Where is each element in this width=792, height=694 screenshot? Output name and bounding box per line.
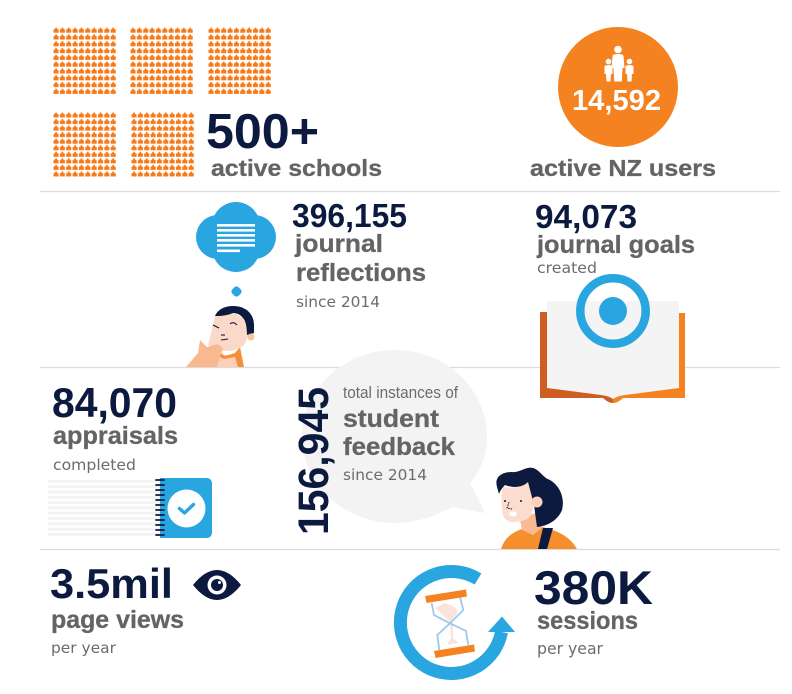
text: total instances of: total instances of [343,383,458,402]
number: 14,592: 14,592 [572,85,661,117]
panel: active schools [53,27,382,181]
label: active NZ users: active NZ users [530,155,716,181]
panel: journal reflections: reflections [296,259,426,287]
label: page views: page views [51,606,184,634]
icon: eye [193,570,241,600]
label: student feedback: student [343,405,440,433]
number: 380K: 380K [534,561,653,614]
panel: page views [50,560,241,657]
icon: thought cloud [196,202,276,298]
label: journal goals: journal goals [536,231,695,259]
panel: journal goals [535,198,695,403]
note: per year: per year [51,639,117,657]
number: 396,155: 396,155 [292,197,407,234]
number: 94,073: 94,073 [535,198,637,235]
panel: student feedback [290,350,577,549]
number: 500+: 500+ [206,105,319,159]
label: sessions: sessions [537,607,638,635]
icon: thinking man [186,306,254,367]
label: active schools: active schools [211,155,382,181]
label: appraisals: appraisals [53,422,178,450]
divider lines [40,192,780,550]
note: per year: per year [537,639,603,658]
icon: woman [496,468,577,549]
icon: hourglass with circular arrow [400,572,515,674]
note: since 2014: since 2014 [343,466,427,484]
panel: appraisals [48,379,212,538]
icon: orange circle with people [558,27,678,147]
note: since 2014: since 2014 [296,293,380,311]
number: 156,945: 156,945 [290,387,338,535]
label: journal reflections: journal [294,230,383,258]
note: completed: completed [53,456,136,474]
panel: student feedback: feedback [343,433,455,461]
icon: target [580,278,646,344]
number: 3.5mil: 3.5mil [50,560,173,607]
panel: journal reflections [186,197,426,367]
panel: sessions [400,561,653,674]
note: created: created [537,259,597,277]
number: 84,070: 84,070 [52,379,177,426]
icon: open book [540,301,685,403]
icon: notebook with check [48,478,212,538]
icon: grid of school people [53,27,272,178]
speech bubble [302,350,487,523]
panel: active NZ users [530,27,716,181]
